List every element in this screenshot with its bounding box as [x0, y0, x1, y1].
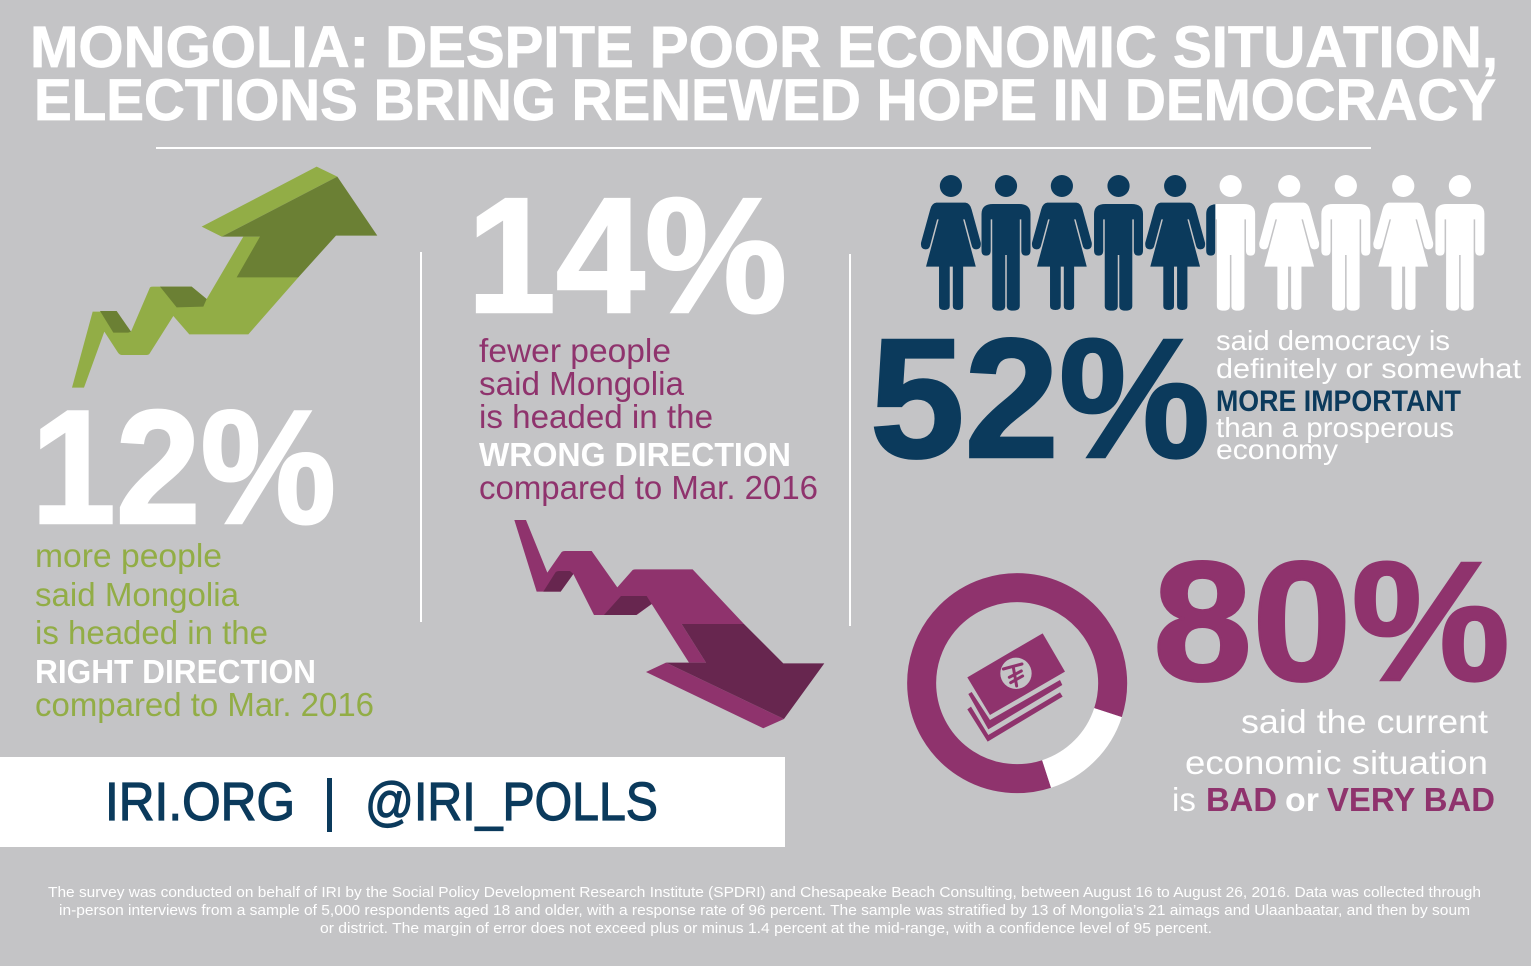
- text: democracy description: definitely or somewhat: [1216, 353, 1521, 384]
- stat: 80 percent: 80%: [1153, 527, 1510, 717]
- banner: website and social handle: IRI.ORG: [105, 772, 295, 832]
- text: wrong direction description: said Mongolia: [479, 365, 685, 402]
- stat: 14 percent: [467, 164, 818, 506]
- stat: 80 percent: [1153, 527, 1510, 818]
- text: economic situation description: said the current: [1241, 703, 1488, 740]
- footer: survey methodology: in-person interviews from a sample of 5,000 respondents aged 18 and older, with a response rate of 96 percent. The sample was stratified by 13 of Mongolia’s 21 aimags and Ulaanbaatar, and then by soum: [59, 903, 1470, 919]
- icon: ten people pictogram: [921, 175, 1484, 311]
- text: wrong direction description: WRONG DIRECTION: [479, 436, 791, 473]
- stat: 12 percent: 12%: [31, 377, 336, 558]
- white figures: [1206, 175, 1484, 311]
- text: economic situation description: BAD: [1206, 781, 1277, 818]
- icon: stack of banknotes: [967, 633, 1065, 742]
- text: economic situation description: economic situation: [1185, 744, 1488, 781]
- text: democracy description: economy: [1216, 434, 1338, 465]
- text: right direction description: [35, 537, 374, 723]
- title: MONGOLIA: DESPITE POOR ECONOMIC SITUATION,: [30, 15, 1498, 80]
- title: ELECTIONS BRING RENEWED HOPE IN DEMOCRACY: [34, 68, 1496, 133]
- text: right direction description: compared to Mar. 2016: [35, 686, 374, 723]
- banner: website and social handle: [0, 757, 785, 847]
- text: economic situation description: VERY BAD: [1327, 781, 1495, 818]
- donut chart: 80 percent: [922, 588, 1113, 779]
- title: [30, 15, 1498, 133]
- icon: maroon falling arrow: [514, 520, 824, 728]
- text: economic situation description: is: [1172, 781, 1196, 818]
- stat: 52 percent: [870, 304, 1521, 494]
- icon: green rising arrow: [72, 167, 377, 388]
- text: democracy description: said democracy is: [1216, 325, 1450, 356]
- text: democracy description: than a prosperous: [1216, 412, 1454, 443]
- text: right direction description: more people: [35, 537, 222, 574]
- text: economic situation description: or: [1285, 781, 1319, 818]
- text: wrong direction description: [479, 332, 818, 506]
- text: right direction description: RIGHT DIRECTION: [35, 653, 316, 690]
- text: right direction description: said Mongolia: [35, 576, 240, 613]
- stat: 12 percent: [31, 377, 374, 723]
- banner: website and social handle: @IRI_POLLS: [365, 772, 658, 832]
- text: right direction description: is headed in the: [35, 614, 268, 651]
- stat: 52 percent: 52%: [870, 304, 1210, 494]
- navy figures: [921, 175, 1205, 311]
- footer: survey methodology: [48, 885, 1481, 937]
- text: wrong direction description: is headed in the: [479, 398, 713, 435]
- text: economic situation description: [1172, 703, 1495, 818]
- text: wrong direction description: compared to Mar. 2016: [479, 469, 818, 506]
- footer: survey methodology: or district. The margin of error does not exceed plus or minus 1.4 percent at the mid-range, with a confidence level of 95 percent.: [320, 921, 1212, 937]
- stat: 14 percent: 14%: [467, 164, 787, 347]
- footer: survey methodology: The survey was conducted on behalf of IRI by the Social Policy Development Research Institute (SPDRI) and Chesapeake Beach Consulting, between August 16 to August 26, 2016. Data was collected through: [48, 885, 1481, 901]
- text: wrong direction description: fewer people: [479, 332, 671, 369]
- text: democracy description: MORE IMPORTANT: [1216, 385, 1461, 418]
- text: democracy description: [1216, 325, 1521, 465]
